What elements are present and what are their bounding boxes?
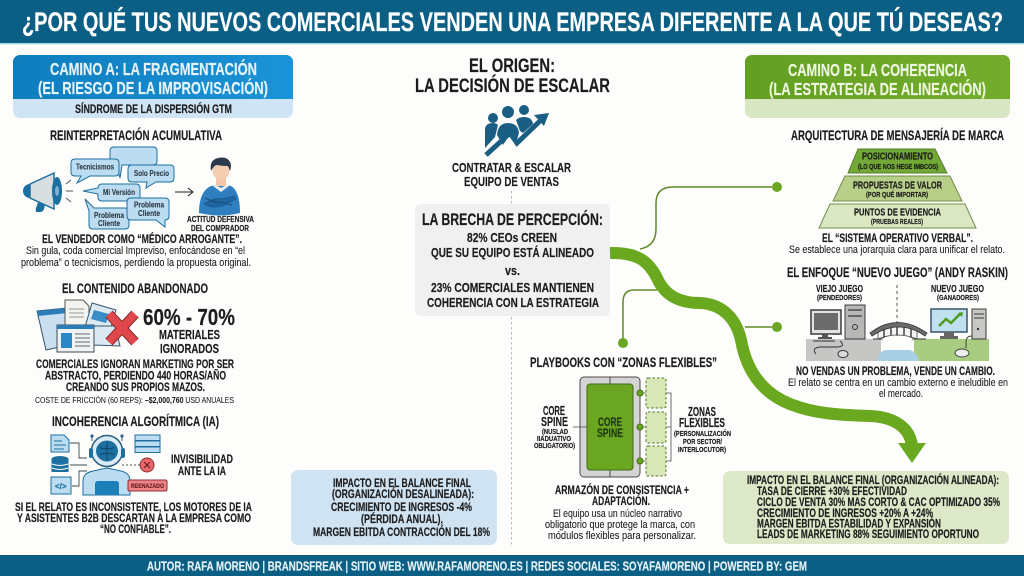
panel: brecha de percepción bbox=[415, 204, 610, 316]
label: actitud defensiva bbox=[187, 215, 254, 233]
labels: viejo y nuevo juego: VIEJO JUEGO bbox=[816, 283, 863, 295]
illustration: old vs new game bridge bbox=[806, 285, 989, 361]
panel: impacto desalineado: MARGEN EBITDA CONTRACCIÓN DEL 18% bbox=[313, 526, 490, 539]
panel: brecha de percepción: COHERENCIA CON LA ESTRATEGIA bbox=[427, 295, 599, 310]
icon: AI robot with sources bbox=[51, 434, 167, 495]
icon: defensive buyer bbox=[199, 158, 240, 216]
text block: armazón: ARMAZÓN DE CONSISTENCIA + bbox=[555, 482, 689, 497]
text block: no vendas un problema bbox=[788, 364, 1008, 400]
text block: médico arrogante bbox=[21, 231, 251, 269]
panel: impacto desalineado: CRECIMIENTO DE INGRESOS -4% bbox=[331, 502, 472, 514]
text: contratar y escalar: EQUIPO DE VENTAS bbox=[464, 175, 559, 189]
branch: to nuevo juego bbox=[745, 322, 782, 332]
text block: armazón: obligatorio que protege la marca, con bbox=[545, 519, 695, 531]
text block: médico arrogante: problema” o tecnicismos, perdiendo la propuesta original. bbox=[21, 257, 251, 269]
branch: to playbooks bbox=[618, 290, 657, 348]
footer banner: AUTOR: RAFA MORENO | BRANDSFREAK | SITIO WEB: WWW.RAFAMORENO.ES | REDES SOCIALES: SOYAFAMORENO | POWERED BY: GEM bbox=[147, 558, 807, 574]
labels: viejo y nuevo juego: (GANADORES) bbox=[937, 295, 979, 302]
chart: message pyramid: (PRUEBAS REALES) bbox=[871, 219, 923, 226]
label: core spine: CORE bbox=[543, 404, 565, 418]
label: core spine: IIADUATIVO bbox=[537, 436, 571, 443]
stat: 60% - 70%: MATERIALES bbox=[159, 327, 220, 342]
arrow: to buyer bbox=[175, 188, 193, 196]
text: contratar y escalar: CONTRATAR & ESCALAR bbox=[452, 161, 571, 175]
text: contratar y escalar bbox=[452, 161, 571, 189]
panel: brecha de percepción: 82% CEOs CREEN bbox=[467, 230, 557, 245]
text block: relato inconsistente: “NO CONFIABLE”. bbox=[100, 522, 171, 536]
text block: comerciales ignoran marketing bbox=[35, 357, 234, 405]
label: core spine: SPINE bbox=[541, 415, 568, 429]
icon: speech bubbles: Problema bbox=[134, 200, 164, 210]
footer banner bbox=[0, 555, 1024, 576]
header banner bbox=[0, 0, 1024, 44]
text block: armazón: El equipo usa un núcleo narrativo bbox=[553, 508, 682, 520]
text block: relato inconsistente bbox=[15, 500, 252, 536]
text block: médico arrogante: Sin gula, coda comercial Impreviso, enfocándose en “el bbox=[26, 245, 245, 257]
branch: to arquitectura bbox=[640, 182, 782, 249]
label: zonas flexibles: FLEXIBLES bbox=[679, 416, 725, 430]
icon: speech bubbles: Tecnicismos bbox=[76, 162, 114, 172]
labels: viejo y nuevo juego bbox=[816, 283, 984, 302]
panel: camino A header: SÍNDROME DE LA DISPERSIÓN GTM bbox=[75, 101, 232, 116]
label: core spine: (NUSLAD bbox=[542, 429, 568, 436]
panel: impacto alineado: TASA DE CIERRE +30% EFECTIVIDAD bbox=[757, 486, 907, 498]
text block: armazón bbox=[545, 482, 696, 542]
text block: comerciales ignoran marketing: ABSTRACTO, PERDIENDO 440 HORAS/AÑO bbox=[45, 368, 226, 382]
chart: message pyramid bbox=[819, 149, 976, 228]
label: zonas flexibles: (PERSONALIZACIÓN bbox=[674, 429, 731, 438]
icon: speech bubbles: Mi Versión bbox=[103, 188, 135, 197]
label: zonas flexibles: INTERLOCUTOR) bbox=[678, 447, 726, 454]
diagram: core spine: SPINE bbox=[597, 428, 623, 440]
panel: camino A header: (EL RIESGO DE LA IMPROVISACIÓN) bbox=[38, 77, 268, 98]
label: zonas flexibles bbox=[674, 405, 731, 454]
icon: team scaling arrow bbox=[485, 105, 549, 155]
arrow: main green path bbox=[610, 253, 926, 463]
panel: impacto desalineado bbox=[291, 470, 497, 545]
panel: camino A header: CAMINO A: LA FRAGMENTACIÓN bbox=[50, 58, 257, 79]
icon: AI robot with sources: </> bbox=[55, 482, 67, 491]
icon: abandoned documents bbox=[37, 300, 135, 352]
text block: relato inconsistente: SI EL RELATO ES INCONSISTENTE, LOS MOTORES DE IA bbox=[15, 500, 252, 514]
diagram: core spine bbox=[573, 377, 671, 477]
chart: message pyramid: POSICIONAMIENTO bbox=[862, 152, 933, 162]
heading: incoherencia algorítmica: INCOHERENCIA ALGORÍTMICA (IA) bbox=[52, 414, 219, 429]
panel: brecha de percepción: LA BRECHA DE PERCEPCIÓN: bbox=[422, 210, 603, 229]
panel: impacto alineado: CRECIMIENTO DE INGRESOS +20% A +24% bbox=[757, 508, 933, 520]
diagram: core spine: CORE bbox=[598, 417, 622, 429]
text block: relato inconsistente: Y ASISTENTES B2B DESCARTAN A LA EMPRESA COMO bbox=[17, 511, 251, 525]
text block: comerciales ignoran marketing: COMERCIALES IGNORAN MARKETING POR SER bbox=[36, 357, 234, 371]
panel: impacto desalineado: (ORGANIZACIÓN DESALINEADA): bbox=[332, 488, 474, 501]
icon: speech bubbles: Problema bbox=[94, 211, 124, 220]
panel: impacto alineado: MARGEN EBITDA ESTABILIDAD Y EXPANSIÓN bbox=[757, 518, 941, 530]
icon: speech bubbles: Cliente bbox=[98, 219, 120, 228]
icon: megaphone bbox=[23, 173, 73, 212]
text block: comerciales ignoran marketing: COSTE DE FRICCIÓN (60 REPS): –$2,000,760 USD ANUALES bbox=[35, 395, 234, 405]
panel: brecha de percepción: 23% COMERCIALES MANTIENEN bbox=[431, 280, 594, 295]
text block: no vendas un problema: el mercado. bbox=[879, 388, 923, 400]
labels: viejo y nuevo juego: (PENDEDORES) bbox=[817, 295, 862, 302]
panel: brecha de percepción: vs. bbox=[505, 263, 520, 278]
panel: camino B header bbox=[745, 55, 1010, 118]
stat: 60% - 70%: IGNORADOS bbox=[160, 341, 219, 356]
label: zonas flexibles: ZONAS bbox=[688, 405, 716, 419]
label: actitud defensiva: DEL COMPRADOR bbox=[191, 224, 249, 233]
text block: armazón: módulos flexibles para personalizar. bbox=[548, 530, 696, 542]
chart: message pyramid: PUNTOS DE EVIDENCIA bbox=[854, 206, 941, 218]
heading: reinterpretación acumulativa: REINTERPRETACIÓN ACUMULATIVA bbox=[50, 128, 222, 143]
labels: viejo y nuevo juego: NUEVO JUEGO bbox=[931, 283, 984, 295]
heading: el origen bbox=[415, 55, 610, 97]
label: invisibilidad ante la IA: ANTE LA IA bbox=[178, 464, 226, 478]
label: core spine bbox=[534, 404, 575, 450]
icon: speech bubbles: Solo Precio bbox=[134, 169, 169, 178]
panel: impacto desalineado: (PÉRDIDA ANUAL), bbox=[361, 513, 443, 526]
heading: playbooks: PLAYBOOKS CON “ZONAS FLEXIBLES” bbox=[530, 355, 717, 370]
panel: brecha de percepción: QUE SU EQUIPO ESTÁ ALINEADO bbox=[431, 245, 594, 260]
chart: message pyramid: (LO QUE NOS HEGE IMBCOS) bbox=[858, 164, 938, 171]
heading: el origen: LA DECISIÓN DE ESCALAR bbox=[415, 73, 610, 97]
icon: speech bubbles bbox=[71, 147, 174, 229]
panel: impacto desalineado: IMPACTO EN EL BALANCE FINAL bbox=[333, 478, 471, 490]
icon: speech bubbles: Cliente bbox=[138, 209, 160, 218]
text block: armazón: ADAPTACIÓN. bbox=[592, 493, 650, 508]
panel: camino A header bbox=[13, 55, 293, 118]
icon: AI robot with sources: REENAZADO bbox=[131, 483, 164, 490]
heading: el contenido abandonado: EL CONTENIDO ABANDONADO bbox=[62, 281, 208, 296]
chart: message pyramid: (POR QUÉ IMPORTAR) bbox=[866, 190, 928, 199]
text block: médico arrogante: EL VENDEDOR COMO “MÉDICO ARROGANTE”. bbox=[42, 231, 242, 246]
label: invisibilidad ante la IA: INVISIBILIDAD bbox=[171, 452, 233, 466]
label: zonas flexibles: POR SECTOR/ bbox=[683, 439, 722, 446]
text block: sistema operativo verbal bbox=[789, 231, 1005, 256]
chart: message pyramid: PROPUESTAS DE VALOR bbox=[853, 180, 942, 192]
stat: 60% - 70% bbox=[143, 304, 235, 356]
panel: impacto alineado bbox=[723, 471, 1009, 544]
heading: el origen: EL ORIGEN: bbox=[469, 55, 555, 77]
stat: 60% - 70%: 60% - 70% bbox=[143, 304, 235, 330]
label: actitud defensiva: ACTITUD DEFENSIVA bbox=[187, 215, 254, 224]
text block: comerciales ignoran marketing: CREANDO SUS PROPIOS MAZOS. bbox=[66, 380, 205, 394]
label: invisibilidad ante la IA bbox=[171, 452, 233, 478]
label: core spine: OBLIGATORIO) bbox=[534, 443, 575, 450]
